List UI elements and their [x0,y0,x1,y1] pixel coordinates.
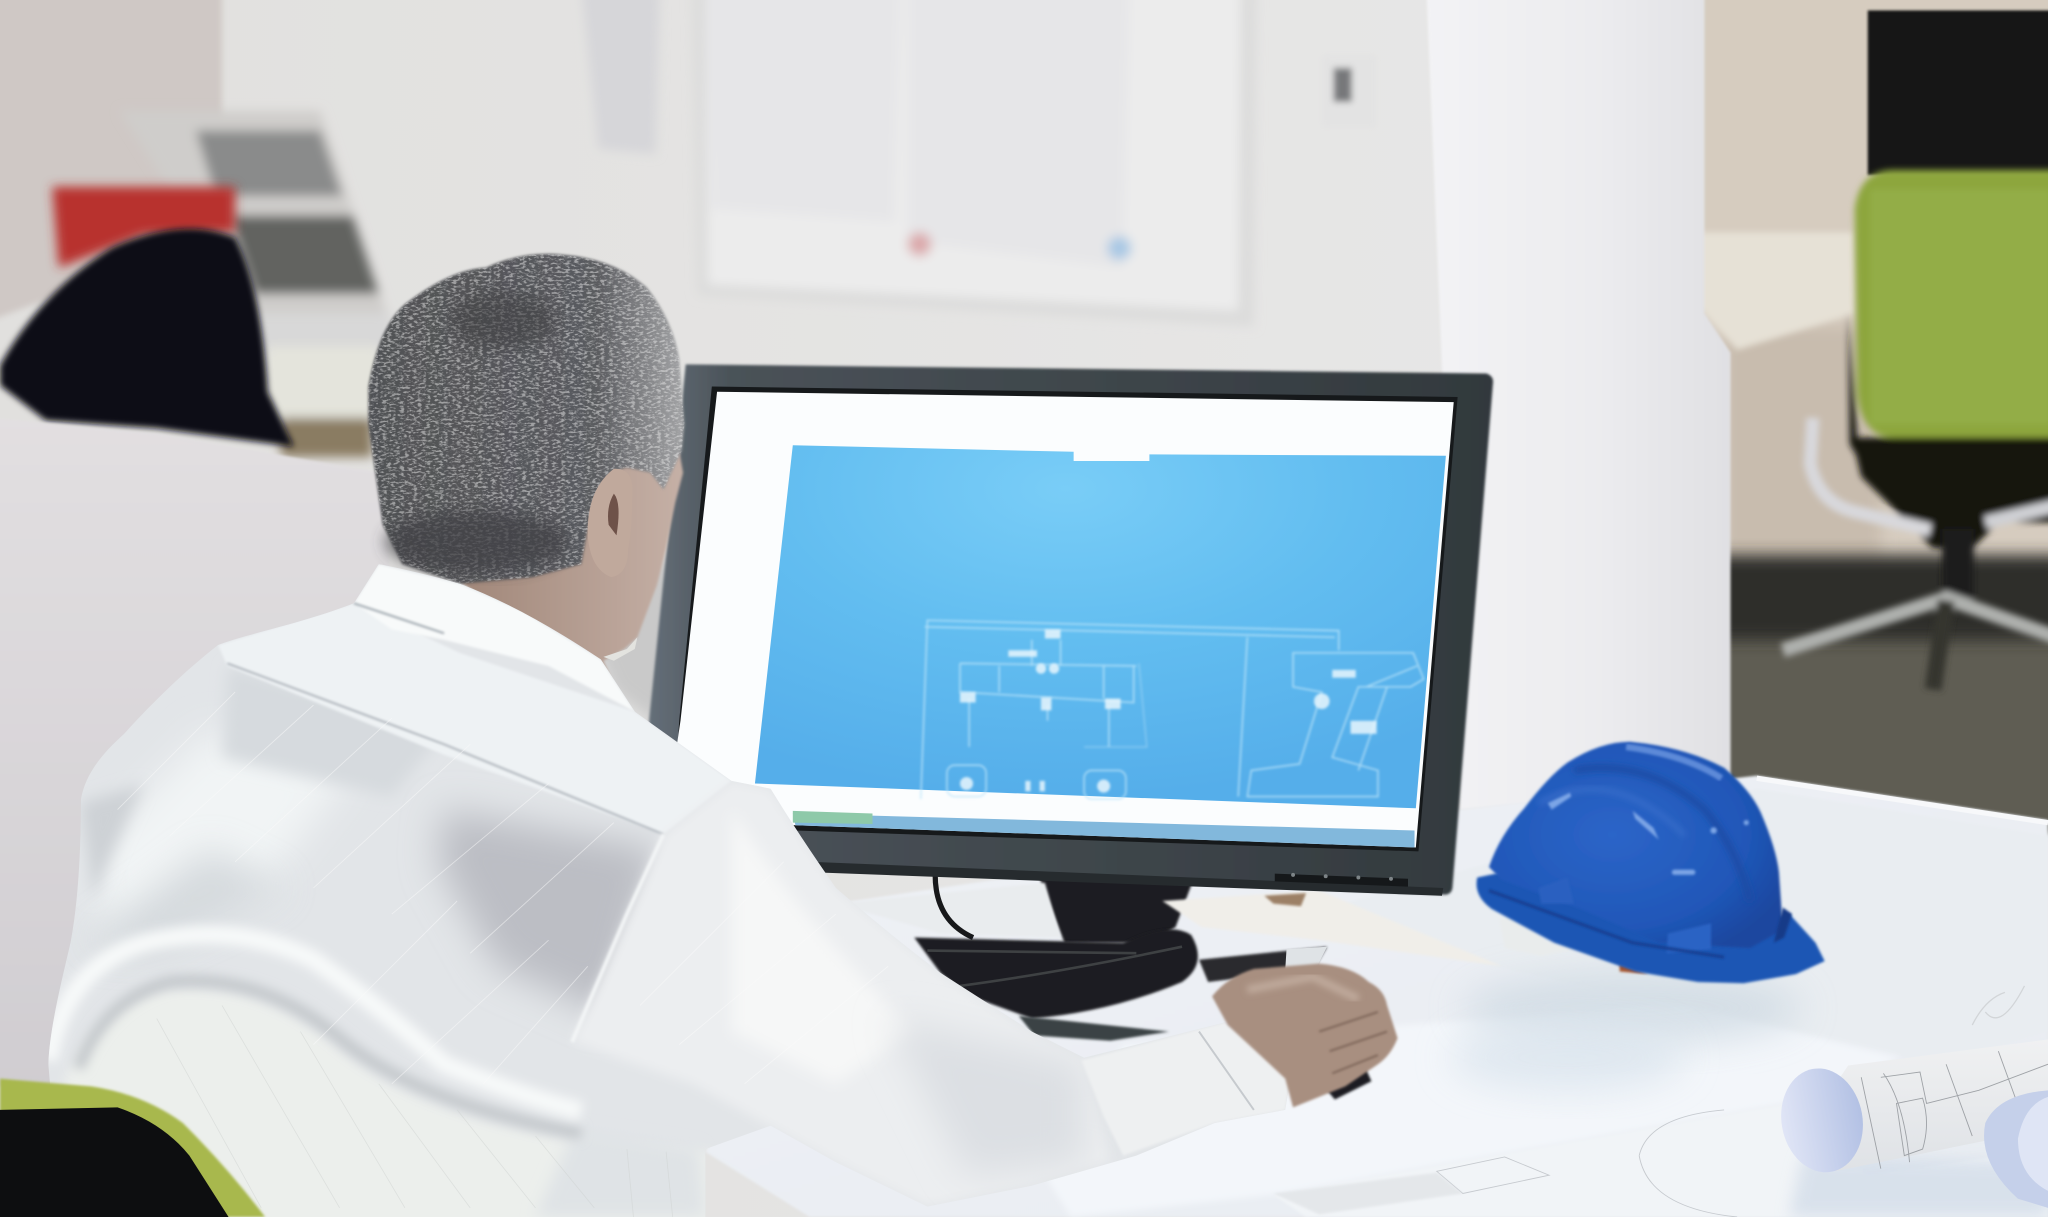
mouse [1319,1067,1371,1099]
engineer seen from behind [39,254,1398,1217]
wall switch [1322,55,1377,128]
blue hard hat [1477,742,1825,983]
brim [1477,872,1825,983]
pinned paper [581,0,660,154]
helmet shadow on desk [1463,972,1802,1045]
collar [354,564,635,712]
first blueprint roll [1773,1039,2048,1179]
side fold shadow [81,786,142,890]
far room wall [1685,0,2048,575]
bezel [647,364,1493,895]
back shadow [438,810,660,1019]
CAD details [960,629,1377,793]
taskbar [793,814,1415,847]
inner bezel shadow [673,387,1458,851]
blueprint sheet under helmet [1306,789,2048,1068]
sleeve [572,781,1110,1207]
roll shadow [1789,1156,2048,1217]
neck and face [451,450,683,686]
monitor stand and cables [836,875,1502,1041]
monitor buttons [1275,873,1408,887]
green office chair [1783,170,2048,689]
lower shirt panel [70,994,560,1217]
phone on desk [1199,947,1327,982]
computer monitor [647,364,1493,896]
far room floor [1711,575,2048,836]
faint scribbles on sheet [1972,986,2024,1025]
yoke panel [218,603,731,834]
shirt cuff [1081,1022,1290,1156]
woven stripes [118,692,614,1084]
hand on mouse [1212,964,1398,1107]
title block on sheet [1437,1110,1737,1217]
specular highlights [1548,793,1749,875]
hair [368,254,684,584]
left corner wall [0,0,222,326]
long fold highlight [48,935,581,1111]
stand neck [1038,875,1195,943]
dome [1489,742,1783,948]
black panel [1868,10,2048,175]
dark jacket silhouette [0,229,294,447]
bright objects behind stand [836,883,1061,938]
CAD drawing on screen [921,620,1424,799]
stubble [603,637,637,661]
ear [588,469,632,577]
long fold shadow on lower back [78,981,581,1133]
whiteboard on wall [692,0,1256,326]
back edge highlight [1757,778,2048,823]
wall section behind monitor [575,548,686,731]
brim clips [1539,877,1574,904]
sleeve seam [572,834,664,1042]
far table [1698,232,1855,350]
lit desk area [1045,1005,1900,1217]
white shirt body [39,555,1306,1217]
rolled blueprints [1773,1039,2048,1208]
blueprint viewport [755,445,1446,808]
drawing sheet in foreground [1273,1103,2048,1217]
monitor cable [935,875,973,938]
desk with blueprint sheets [705,776,2048,1217]
white application window [666,392,1454,847]
crown ridge highlights [1626,747,1721,778]
chair back in foreground [0,1079,265,1217]
keyboard edge [1019,1016,1169,1041]
second blueprint roll [1984,1090,2048,1208]
cable bundle [914,929,1198,1019]
white chin strap [1499,917,1587,956]
red binders [52,187,235,268]
white pillar [1426,0,1731,810]
white partition [0,418,405,1086]
left shelf with stacked files [120,111,392,457]
